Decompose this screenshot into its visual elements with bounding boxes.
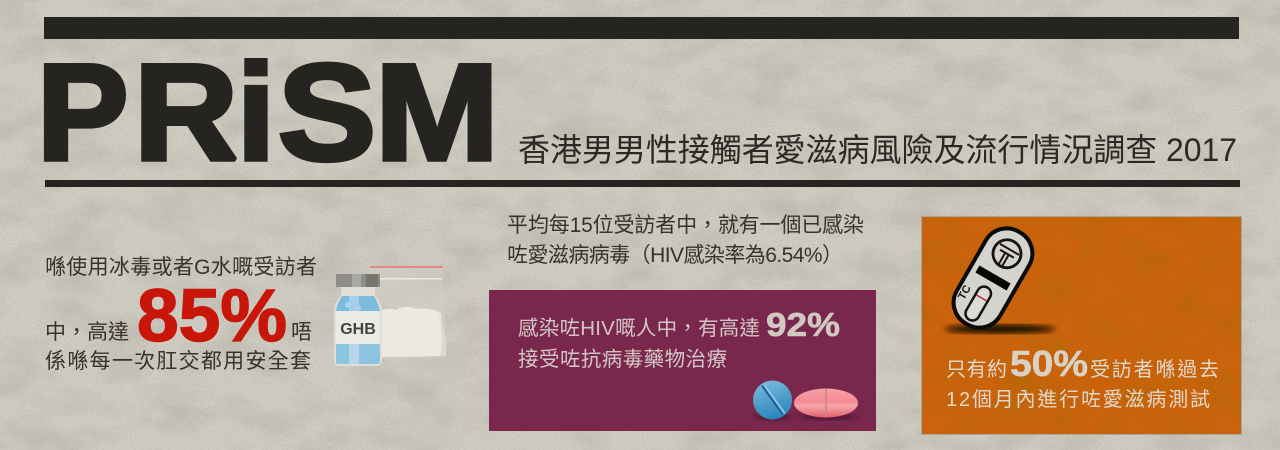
panel text: 感染咗HIV嘅人中，有高達	[518, 317, 760, 340]
text: HIV prevalence	[507, 214, 864, 267]
panel text line 1: 只有約	[946, 358, 1007, 381]
icon: test kit shadow	[945, 324, 1055, 334]
icon: blue pill	[753, 380, 792, 420]
panel text line 2: 12個月內進行咗愛滋病測試	[946, 388, 1210, 411]
header rule	[45, 180, 1240, 187]
panel: testing statistic: 受訪者喺過去	[1090, 358, 1219, 381]
text line 2 prefix: 中，高達	[45, 321, 129, 344]
panel: treatment statistic	[489, 290, 876, 431]
top black bar	[44, 17, 1239, 39]
icon: pink pill	[794, 388, 858, 420]
title: PRiSM: P	[37, 36, 128, 190]
text line 2 suffix: 唔	[291, 321, 312, 344]
number 92%: 92%	[766, 306, 840, 343]
title: PRiSM	[37, 36, 499, 190]
text line 3: 係喺每一次肛交都用安全套	[45, 350, 311, 373]
title: PRiSM: R	[134, 36, 238, 190]
text: HIV prevalence: 咗愛滋病病毒（HIV感染率為6.54%）	[507, 244, 843, 267]
title: PRiSM: M	[375, 36, 499, 190]
title: PRiSM: S	[278, 36, 376, 190]
panel: treatment statistic: 接受咗抗病毒藥物治療	[518, 348, 727, 371]
icon: GHB bottle	[334, 274, 382, 366]
icon: plastic bag with white powder	[370, 266, 447, 358]
icon: HIV test kit	[945, 220, 1041, 336]
text: HIV prevalence: 平均每15位受訪者中，就有一個已感染	[507, 214, 864, 237]
bottle label GHB: GHB	[340, 321, 376, 338]
text line 1: 喺使用冰毒或者G水嘅受訪者	[45, 256, 317, 279]
kit letters: TC	[956, 283, 974, 302]
panel: condom use statistic	[45, 256, 317, 373]
big number 85%: 85%	[137, 274, 287, 357]
subtitle: 香港男男性接觸者愛滋病風險及流行情況調查 2017	[518, 132, 1237, 168]
title: PRiSM: i	[237, 36, 275, 190]
panel: testing statistic	[921, 216, 1242, 435]
number 50%: 50%	[1010, 343, 1088, 384]
